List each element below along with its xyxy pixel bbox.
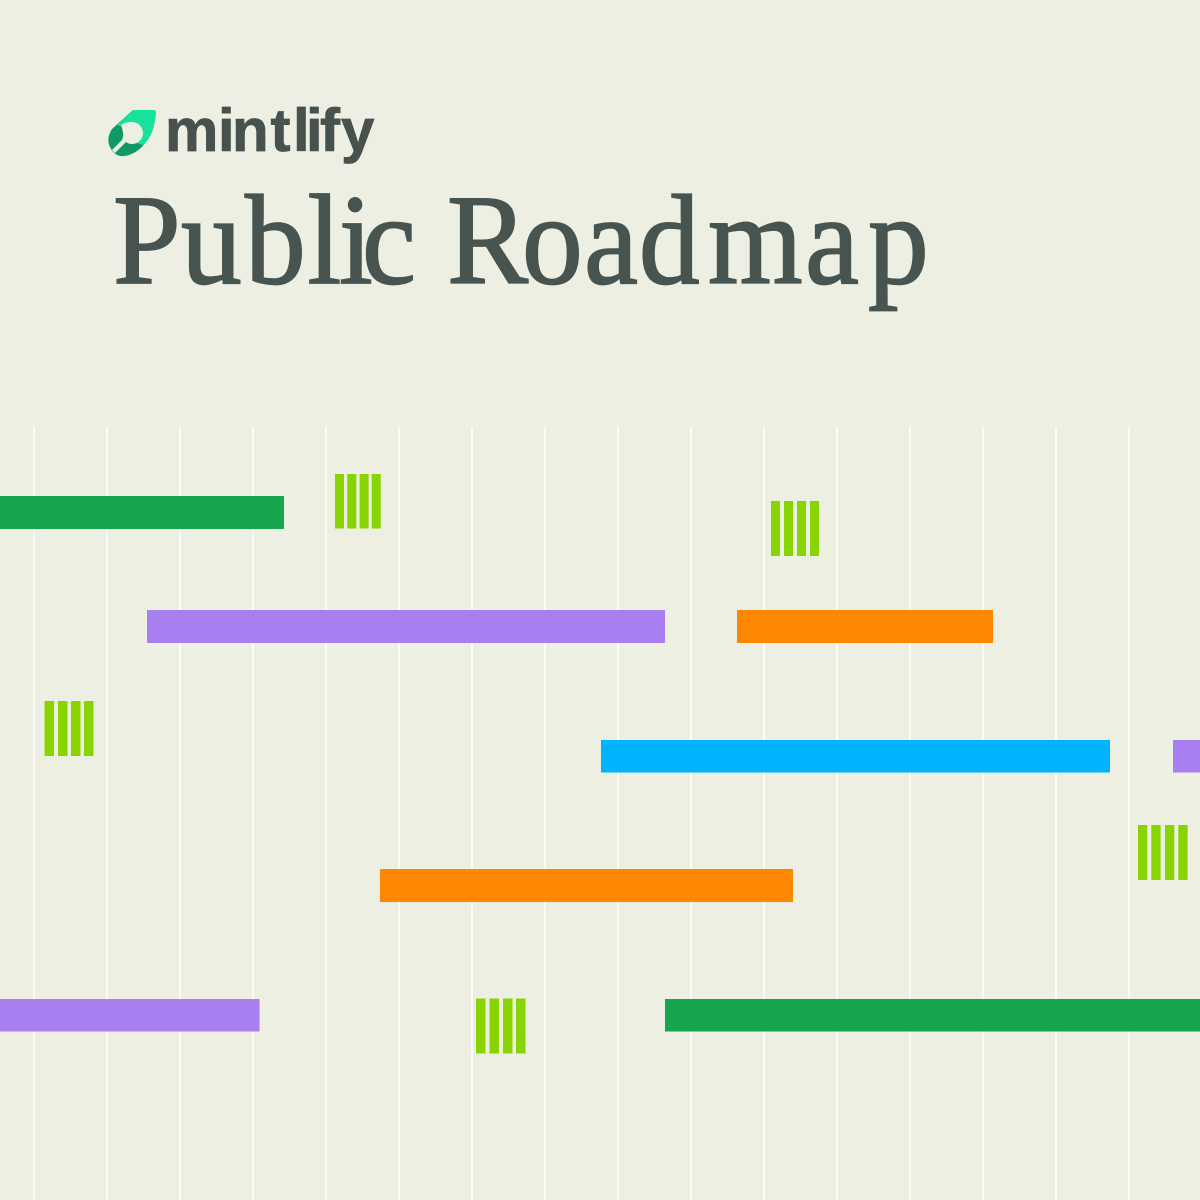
bar: orange row 4	[380, 869, 793, 902]
bar: blue row 3	[601, 740, 1110, 772]
logo: mintlify	[108, 97, 375, 164]
milestone ticks 1	[335, 474, 381, 528]
bar: purple row 3 edge	[1173, 740, 1200, 772]
bar: green row 5	[665, 999, 1200, 1032]
milestone ticks 2	[771, 501, 819, 556]
icon: mint leaf	[108, 110, 156, 156]
bar: green top	[0, 496, 284, 529]
wordmark: mintlify	[165, 97, 375, 164]
bar: purple row 2	[147, 610, 665, 643]
roadmap chart	[0, 427, 1200, 1200]
milestone ticks 4	[1138, 825, 1188, 880]
milestone ticks 3	[44, 701, 94, 756]
title: Public Roadmap	[113, 170, 929, 312]
bar: purple row 5	[0, 999, 260, 1032]
bar: orange row 2	[737, 610, 993, 643]
milestone ticks 5	[476, 998, 526, 1054]
